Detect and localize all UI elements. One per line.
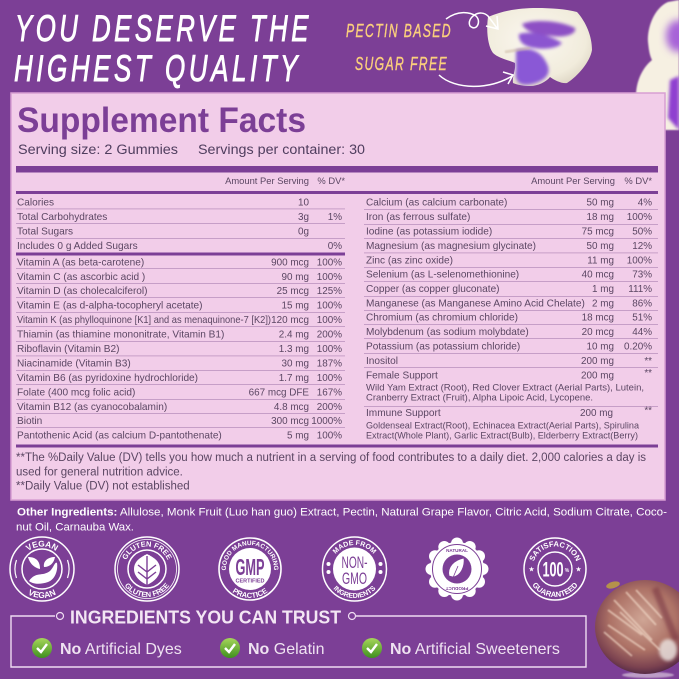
table: right column nutrients — [366, 198, 652, 440]
table: left column nutrients: Folate (400 mcg folic acid) — [17, 388, 135, 398]
table: right column nutrients: 20 mcg — [582, 327, 614, 338]
table: left column nutrients: 125% — [317, 286, 342, 297]
table: left column nutrients: 1000% — [311, 416, 342, 427]
table: right column nutrients: 1 mg — [592, 284, 614, 295]
table: right column nutrients: Manganese (as Manganese Amino Acid Chelate) — [366, 298, 585, 310]
table: left column nutrients: Thiamin (as thiamine mononitrate, Vitamin B1) — [17, 330, 224, 340]
table: left column nutrients: Vitamin D (as cholecalciferol) — [17, 286, 148, 297]
table: left column nutrients: 100% — [317, 258, 342, 268]
table: left column nutrients: Vitamin A (as beta-carotene) — [17, 258, 144, 268]
footnotes: **The %Daily Value (DV) tells you how much a nutrient in a serving of food contributes to a daily diet. 2,000 calories a day is — [16, 452, 646, 464]
badge: gluten free: GLUTEN FREE — [122, 541, 172, 560]
table: left column nutrients: 167% — [317, 388, 342, 398]
table: right column nutrients: 86% — [632, 298, 652, 310]
table: right column nutrients: 100% — [627, 256, 652, 266]
thick rules — [16, 166, 658, 448]
table: right column nutrients: ** — [644, 406, 652, 416]
badge: natural product — [426, 538, 488, 600]
table: right column nutrients: Zinc (as zinc oxide) — [366, 256, 453, 266]
table: left column nutrients: Total Sugars — [17, 226, 73, 238]
title: Supplement Facts — [17, 101, 306, 140]
panel: ingredients you can trust — [11, 608, 586, 667]
row rules — [16, 208, 658, 428]
badge: satisfaction guaranteed: GUARANTEED — [533, 582, 577, 597]
column headers right: Amount Per Serving — [531, 175, 615, 186]
table: right column nutrients: Iodine (as potassium iodide) — [366, 226, 492, 238]
table: right column nutrients: 75 mcg — [582, 226, 614, 238]
illustration: halved grape — [595, 580, 679, 678]
table: left column nutrients: 100% — [317, 373, 342, 384]
item: no artificial sweeteners: No Artificial Sweeteners — [390, 641, 560, 658]
other ingredients: Other Ingredients: Allulose, Monk Fruit (Luo han guo) Extract, Pectin, Natural Grape Flavor, Citric Acid, Sodium Citrate, Coco- — [17, 506, 667, 518]
badge: gmp certified: PRACTICE — [232, 588, 268, 598]
badge: natural product: PRODUCT — [445, 586, 468, 591]
badge: vegan: VEGAN — [30, 589, 56, 598]
table: left column nutrients: Pantothenic Acid (as calcium D-pantothenate) — [17, 430, 222, 442]
table: right column nutrients: 40 mcg — [582, 270, 614, 280]
table: left column nutrients: 0g — [298, 226, 309, 238]
table: right column nutrients: 50 mg — [587, 198, 614, 208]
table: right column nutrients: Magnesium (as magnesium glycinate) — [366, 241, 536, 252]
table: left column nutrients: 300 mcg — [271, 416, 309, 427]
table: right column nutrients: 200 mg — [581, 356, 614, 367]
heading: you deserve the highest quality — [14, 8, 312, 89]
table: left column nutrients: 15 mg — [282, 300, 309, 312]
table: right column nutrients: 44% — [632, 327, 652, 338]
table: right column nutrients: 4% — [638, 198, 652, 208]
table: left column nutrients: 667 mcg DFE — [249, 388, 309, 398]
table: left column nutrients: Niacinamide (Vitamin B3) — [17, 358, 131, 370]
heading: you deserve the highest quality: YOU DESERVE THE — [15, 8, 312, 49]
table: left column nutrients: 4.8 mcg — [274, 402, 309, 413]
table: right column nutrients: Potassium (as potassium chloride) — [366, 342, 520, 352]
table: left column nutrients: 900 mcg — [271, 258, 309, 268]
column headers right: % DV* — [624, 175, 652, 186]
table: left column nutrients: Vitamin C (as ascorbic acid ) — [17, 272, 145, 283]
badge: satisfaction guaranteed: ★ — [575, 566, 582, 574]
heading: you deserve the highest quality: HIGHEST QUALITY — [14, 48, 301, 89]
table: right column nutrients: 50 mg — [587, 241, 614, 252]
footnotes — [16, 452, 646, 492]
table: right column nutrients: 100% — [627, 212, 652, 223]
table: right column nutrients: Cranberry Extract (Fruit), Alpha Lipoic Acid, Lycopene. — [366, 392, 593, 402]
table: right column nutrients: ** — [644, 368, 652, 379]
table: left column nutrients: 1.7 mg — [279, 373, 309, 384]
table: left column nutrients: Includes 0 g Added Sugars — [17, 241, 138, 252]
column headers left: % DV* — [317, 175, 345, 186]
table: right column nutrients: Immune Support — [366, 408, 441, 419]
table: right column nutrients: 18 mcg — [582, 312, 614, 324]
table: left column nutrients: 10 — [298, 198, 310, 208]
badge: non-gmo: NON- — [342, 553, 368, 572]
table: right column nutrients: Molybdenum (as sodium molybdate) — [366, 327, 529, 338]
badge: gmp certified: GOOD MANUFACTURING — [222, 540, 278, 570]
table: left column nutrients — [17, 198, 342, 442]
badge: non-gmo: INGREDIENTS — [334, 586, 376, 598]
table: right column nutrients: 51% — [632, 312, 652, 324]
panel: supplement facts — [11, 93, 665, 500]
table: left column nutrients: 100% — [317, 315, 342, 326]
serving info: Serving size: 2 Gummies — [18, 142, 178, 157]
table: right column nutrients: 10 mg — [587, 342, 614, 352]
table: right column nutrients: 18 mg — [587, 212, 614, 223]
table: left column nutrients: Calories — [17, 198, 54, 208]
table: left column nutrients: 100% — [317, 430, 342, 442]
serving info — [18, 142, 365, 157]
table: right column nutrients: Goldenseal Extract(Root), Echinacea Extract(Aerial Parts), Spirulina — [366, 420, 640, 430]
arrow: to gummy from pectin based — [446, 13, 498, 29]
table: left column nutrients: 1% — [328, 212, 342, 223]
table: left column nutrients: 100% — [317, 272, 342, 283]
table: right column nutrients: 50% — [632, 226, 652, 238]
table: right column nutrients: Calcium (as calcium carbonate) — [366, 198, 507, 208]
badge: vegan: VEGAN — [25, 540, 58, 551]
illustration: gummy cut in half — [446, 8, 592, 86]
item: no gelatin — [220, 638, 324, 658]
footnotes: **Daily Value (DV) not established — [16, 480, 190, 492]
table: left column nutrients: 0% — [328, 241, 342, 252]
table: right column nutrients: Female Support — [366, 370, 438, 382]
table: left column nutrients: Vitamin B6 (as pyridoxine hydrochloride) — [17, 373, 198, 384]
column headers right — [531, 175, 652, 186]
illustration: corner gummy bears — [636, 0, 679, 130]
table: right column nutrients: Iron (as ferrous sulfate) — [366, 212, 470, 223]
table: left column nutrients: 30 mg — [282, 358, 309, 370]
table: right column nutrients: 200 mg — [581, 370, 614, 382]
table: right column nutrients: 0.20% — [624, 342, 652, 352]
table: left column nutrients: 200% — [317, 330, 342, 340]
table: right column nutrients: Copper (as copper gluconate) — [366, 284, 500, 295]
badge: gluten free: GLUTEN FREE — [126, 582, 170, 598]
table: left column nutrients: Biotin — [17, 416, 42, 427]
table: left column nutrients: 5 mg — [287, 430, 309, 442]
item: no gelatin: No Gelatin — [248, 641, 324, 658]
item: no artificial dyes: No Artificial Dyes — [60, 641, 182, 658]
table: left column nutrients: Riboflavin (Vitamin B2) — [17, 344, 119, 355]
table: left column nutrients: Total Carbohydrates — [17, 212, 107, 223]
table: left column nutrients: 100% — [317, 300, 342, 312]
table: left column nutrients: Vitamin B12 (as cyanocobalamin) — [17, 402, 167, 413]
table: right column nutrients: Wild Yam Extract (Root), Red Clover Extract (Aerial Parts), Lutein, — [366, 382, 644, 392]
table: left column nutrients: 2.4 mg — [279, 330, 309, 340]
callout: pectin based and sugar free — [346, 21, 452, 74]
table: left column nutrients: 90 mg — [282, 272, 309, 283]
other ingredients: nut Oil, Carnauba Wax. — [16, 522, 134, 534]
table: left column nutrients: 100% — [317, 344, 342, 355]
badge: satisfaction guaranteed: ★ — [528, 566, 535, 574]
table: right column nutrients: 111% — [628, 284, 652, 295]
table: right column nutrients: Inositol — [366, 356, 398, 367]
item: no artificial dyes — [32, 638, 182, 658]
table: left column nutrients: Vitamin K (as phylloquinone [K1] and as menaquinone-7 [K2]) — [17, 315, 271, 326]
badge: vegan — [9, 536, 75, 602]
badge: natural product: NATURAL — [446, 548, 468, 553]
table: right column nutrients: 200 mg — [580, 408, 613, 419]
badge: non-gmo: MADE FROM — [332, 540, 376, 554]
other ingredients — [16, 506, 667, 534]
table: right column nutrients: 12% — [632, 241, 652, 252]
table: left column nutrients: 1.3 mg — [279, 344, 309, 355]
table: left column nutrients: 200% — [317, 402, 342, 413]
badge: satisfaction guaranteed: % — [565, 568, 570, 574]
callout: pectin based and sugar free: SUGAR FREE — [355, 54, 448, 74]
footnotes: used for general nutrition advice. — [16, 466, 183, 478]
badge: gluten free — [114, 536, 180, 602]
table: left column nutrients: 187% — [317, 358, 342, 370]
table: left column nutrients: 25 mcg — [277, 286, 309, 297]
table: right column nutrients: ** — [644, 356, 652, 367]
table: right column nutrients: 2 mg — [592, 298, 614, 310]
table: right column nutrients: Chromium (as chromium chloride) — [366, 312, 518, 324]
badge: satisfaction guaranteed: SATISFACTION — [530, 541, 581, 562]
table: right column nutrients: Extract(Whole Plant), Garlic Extract(Bulb), Elderberry Extract(Berry) — [366, 430, 638, 440]
column headers left: Amount Per Serving — [225, 175, 309, 186]
badge: gmp certified: GMP — [236, 554, 264, 580]
column headers left — [225, 175, 345, 186]
serving info: Servings per container: 30 — [198, 142, 365, 157]
table: left column nutrients: 120 mcg — [271, 315, 309, 326]
badge: gmp certified — [218, 537, 282, 601]
trust heading: INGREDIENTS YOU CAN TRUST — [70, 608, 341, 628]
table: right column nutrients: Selenium (as L-selenomethionine) — [366, 270, 519, 280]
badge: satisfaction guaranteed: 100 — [542, 558, 564, 582]
badge: gmp certified: CERTIFIED — [235, 578, 265, 584]
badge: satisfaction guaranteed — [523, 537, 587, 601]
callout: pectin based and sugar free: PECTIN BASED — [346, 21, 452, 41]
badge: non-gmo: GMO — [342, 569, 367, 588]
badge: non-gmo — [322, 536, 388, 602]
table: right column nutrients: 73% — [632, 270, 652, 280]
table: right column nutrients: 11 mg — [587, 256, 614, 266]
table: left column nutrients: 3g — [298, 212, 309, 223]
arrow: to gummy from sugar free — [439, 72, 513, 86]
table: left column nutrients: Vitamin E (as d-alpha-tocopheryl acetate) — [17, 300, 203, 312]
